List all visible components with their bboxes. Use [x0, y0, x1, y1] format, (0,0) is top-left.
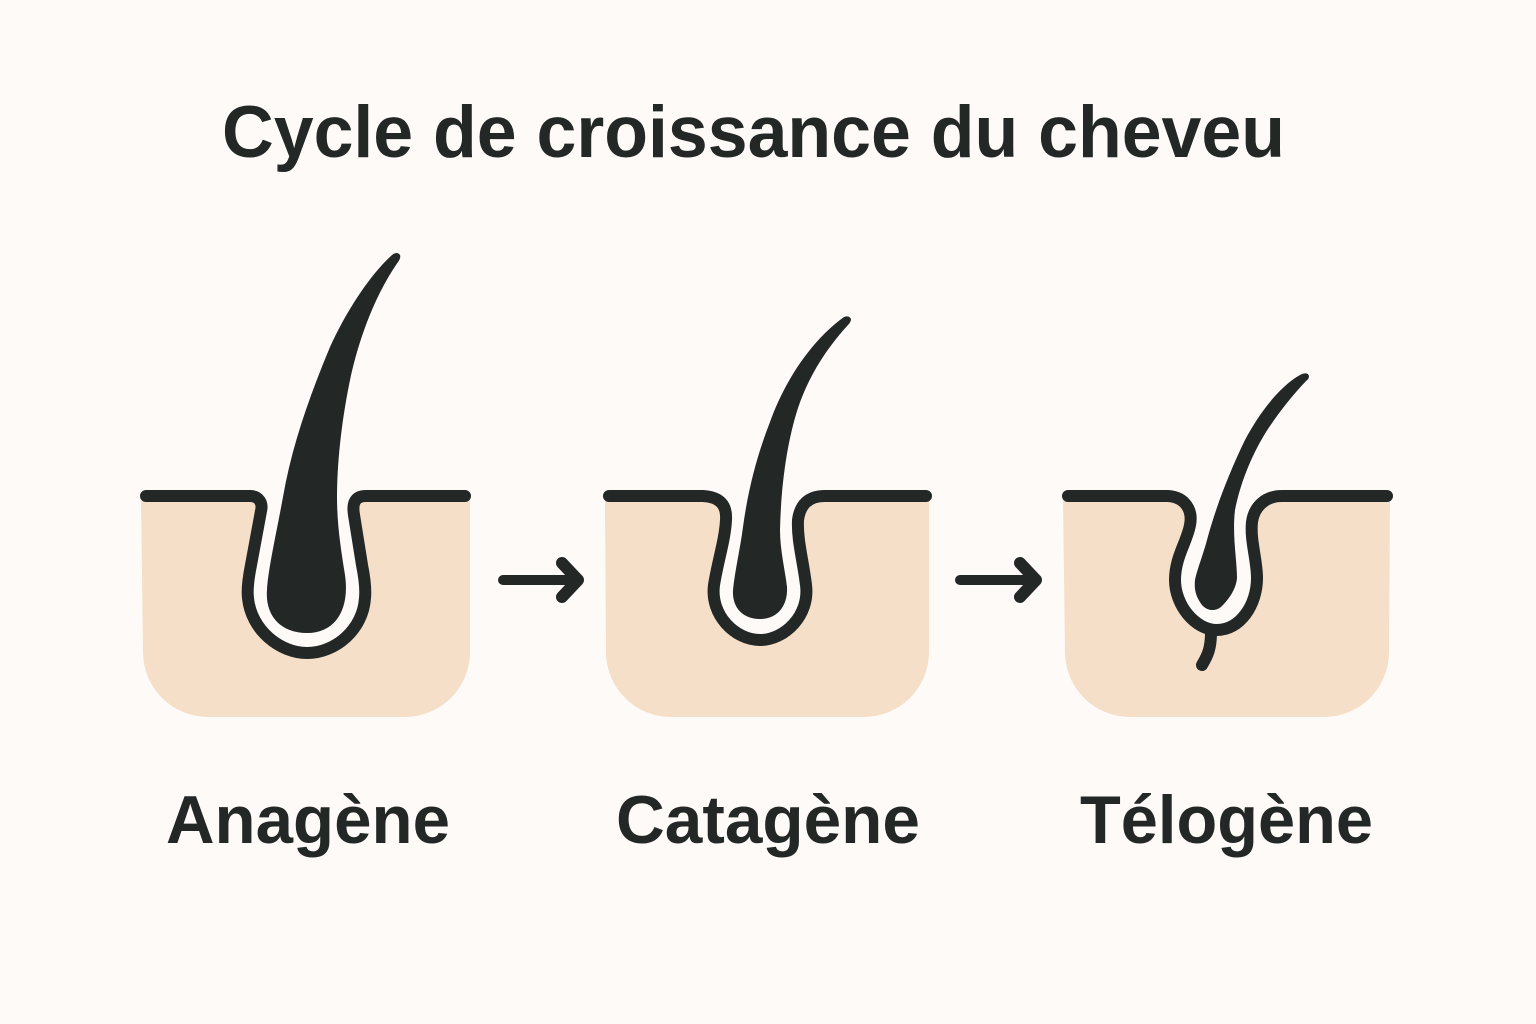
label: télogène: Télogène: [1080, 782, 1373, 858]
arrow: anagène to catagène: [503, 563, 578, 597]
hair shaft and bulb: [267, 253, 400, 633]
label: catagène: Catagène: [616, 782, 920, 858]
panel: télogène diagram: [1063, 373, 1390, 717]
follicle root: [1202, 632, 1211, 665]
panel: anagène diagram: [141, 253, 470, 717]
follicle outline: [609, 496, 926, 640]
panel: catagène diagram: [605, 316, 929, 717]
follicle outline: [146, 496, 465, 653]
skin block: [605, 496, 929, 717]
title: Cycle de croissance du cheveu: [222, 92, 1285, 173]
label: anagène: Anagène: [166, 782, 450, 858]
skin block: [1063, 496, 1390, 717]
follicle outline: [1068, 496, 1387, 630]
hair shaft and bulb: [733, 316, 851, 619]
hair shaft and bulb: [1195, 373, 1309, 610]
skin block: [141, 496, 470, 717]
arrow: catagène to télogène: [960, 563, 1036, 597]
